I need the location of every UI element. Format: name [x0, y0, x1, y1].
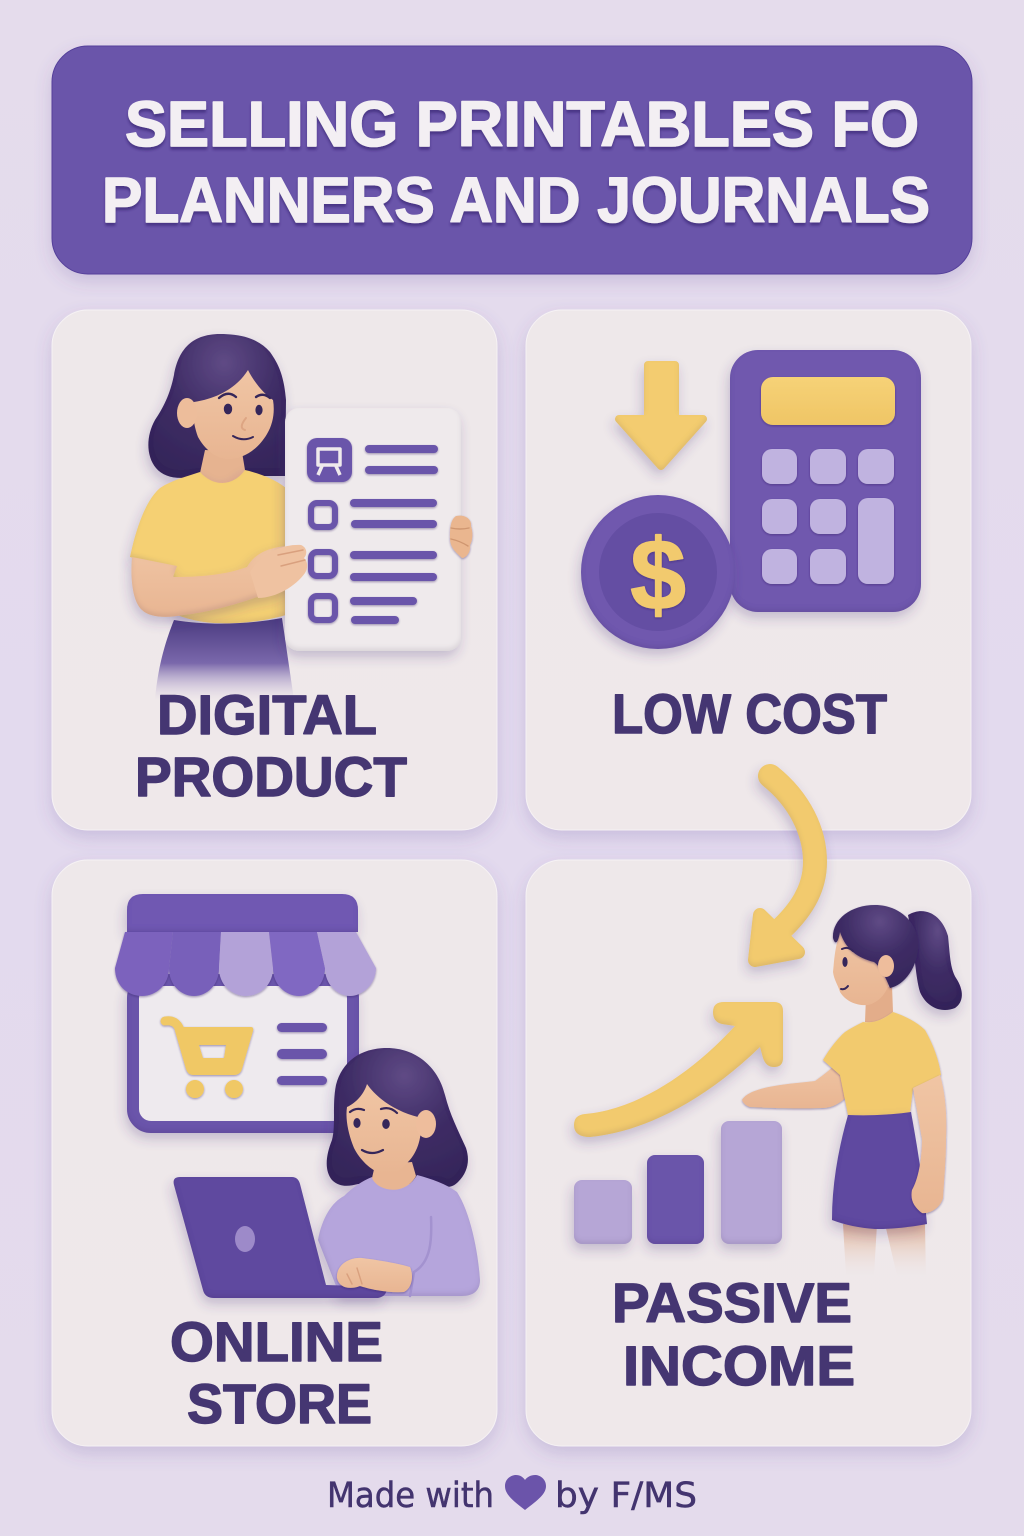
checklist paper — [285, 408, 461, 651]
hand — [337, 1258, 412, 1292]
panel: passive income — [526, 776, 971, 1446]
eye and brow — [841, 948, 853, 989]
label — [135, 683, 407, 808]
checkboxes — [311, 503, 335, 620]
arm — [131, 545, 305, 617]
footer credit — [327, 1475, 697, 1516]
face — [346, 1084, 421, 1174]
illustration: storefront — [115, 894, 376, 1127]
icon: cart — [165, 1021, 253, 1098]
label — [170, 1310, 383, 1435]
neck — [200, 450, 245, 484]
arrow: curved from low cost — [755, 776, 815, 960]
label: DIGITAL — [157, 683, 377, 746]
text lines — [350, 445, 438, 624]
right hand — [450, 516, 472, 558]
hair back — [148, 334, 286, 478]
skirt — [155, 618, 294, 700]
icon: dollar coin: $ — [630, 519, 686, 631]
list lines — [277, 1023, 327, 1085]
head — [833, 925, 893, 1005]
awning scallops — [115, 932, 376, 996]
arrow: rising — [574, 1002, 783, 1137]
icon: calculator — [730, 350, 921, 612]
bar chart — [574, 1121, 782, 1244]
illustration: woman at laptop — [174, 1048, 480, 1298]
shirt — [823, 1012, 941, 1115]
footer credit: Made with — [327, 1476, 494, 1516]
panel: digital product — [52, 310, 497, 830]
shirt — [130, 470, 286, 623]
label: PRODUCT — [135, 745, 407, 808]
near arm — [742, 1060, 852, 1108]
panel: online store — [52, 860, 497, 1446]
ear — [878, 955, 894, 977]
ponytail — [908, 911, 962, 1010]
fingers on paper — [250, 545, 307, 598]
illustration: woman with ponytail — [742, 905, 962, 1280]
legs — [843, 1224, 926, 1280]
title banner — [52, 46, 972, 274]
neck — [865, 985, 893, 1022]
footer credit: by F/MS — [555, 1476, 697, 1516]
icon tile — [307, 438, 352, 482]
label — [612, 1271, 855, 1397]
label: PASSIVE — [612, 1271, 852, 1334]
label: STORE — [187, 1372, 372, 1435]
icon: down arrow — [619, 365, 703, 466]
panel: low cost — [526, 310, 971, 830]
hair — [833, 905, 918, 988]
hair — [327, 1048, 468, 1187]
icon: dollar coin — [581, 495, 735, 649]
eyes and mouth — [219, 394, 270, 439]
face — [193, 370, 274, 459]
title text — [102, 88, 930, 236]
eyes and mouth — [350, 1108, 397, 1153]
sweater — [318, 1175, 480, 1296]
icon: laptop — [174, 1177, 386, 1298]
icon: heart — [505, 1475, 546, 1510]
label: LOW COST — [612, 682, 887, 745]
label: INCOME — [623, 1334, 855, 1397]
far arm — [911, 1075, 946, 1213]
label: ONLINE — [170, 1310, 383, 1373]
ear — [177, 398, 197, 428]
illustration: woman holding checklist — [130, 334, 472, 700]
neck — [372, 1162, 416, 1190]
skirt — [832, 1112, 927, 1229]
title text: PLANNERS AND JOURNALS — [102, 164, 930, 236]
ear — [416, 1110, 436, 1138]
sleeve seam — [410, 1217, 431, 1296]
title text: SELLING PRINTABLES FO — [125, 88, 919, 160]
window frame — [133, 980, 353, 1127]
awning top — [127, 894, 358, 932]
